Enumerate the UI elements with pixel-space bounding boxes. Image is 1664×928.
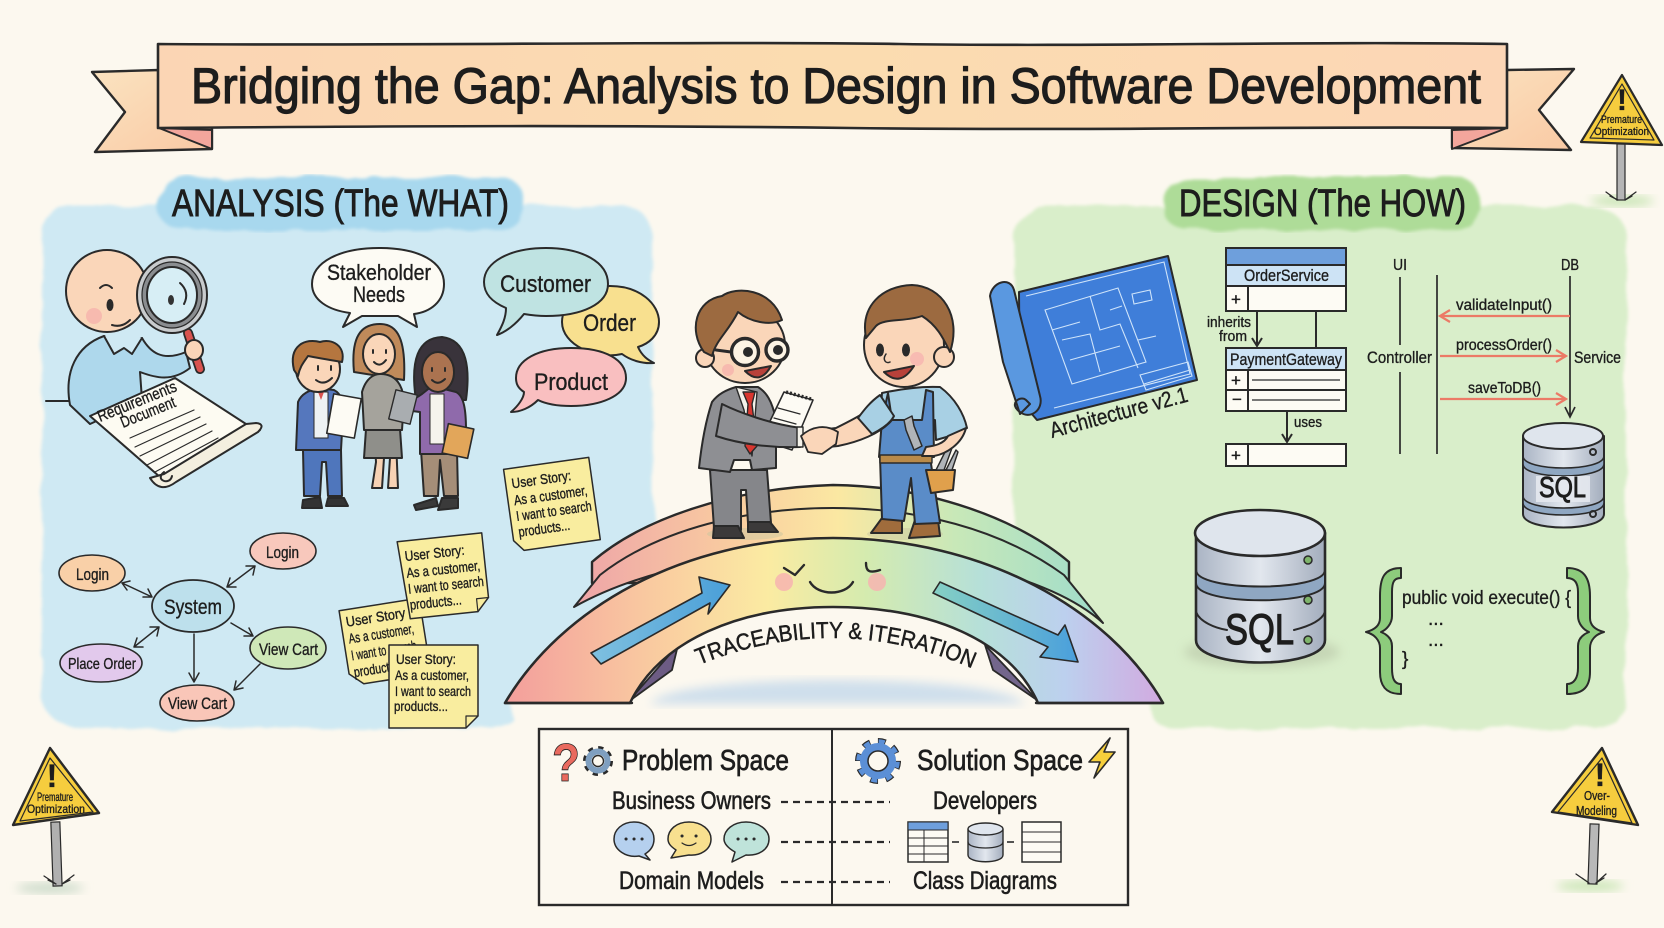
use case: view cart pink: View Cart	[168, 694, 227, 713]
sticky note: middle: products...	[409, 591, 462, 613]
class: payment gateway: +	[1231, 371, 1241, 390]
tool pouch	[926, 446, 958, 493]
ribbon tail: right	[1452, 69, 1574, 150]
row: business owners to developers	[612, 787, 1037, 815]
database small: SQL: SQL	[1539, 472, 1586, 504]
row: chat icons to diagram icons	[614, 822, 1061, 862]
class: order service: +	[1231, 290, 1241, 309]
solution space heading: Solution Space	[917, 745, 1083, 777]
sticky note: front: products...	[394, 698, 448, 714]
row: business owners to developers: Developers	[933, 787, 1037, 815]
inherits arrow	[1207, 311, 1316, 348]
icon: class table	[908, 822, 948, 862]
UML class diagram	[1207, 248, 1346, 466]
use case: view cart pink	[160, 685, 234, 721]
use case: system	[152, 580, 234, 632]
warning sign: premature optimization bottom left: Premature	[37, 790, 73, 804]
database large: SQL: SQL	[1225, 606, 1294, 654]
message: saveToDB: saveToDB()	[1468, 380, 1541, 397]
sticky note: middle: I want to search	[407, 573, 485, 597]
use case diagram	[59, 533, 326, 721]
sticky note: behind: products...	[353, 656, 405, 680]
sticky note: behind	[339, 598, 431, 686]
warning sign: premature optimization bottom left	[13, 748, 99, 893]
stakeholders group	[293, 324, 474, 510]
class: empty: +	[1231, 446, 1241, 465]
blueprint	[990, 256, 1197, 443]
title banner	[92, 43, 1574, 152]
warning sign: premature optimization bottom left: !	[47, 758, 57, 794]
traceability arrow left	[591, 577, 730, 664]
icon: empty table	[1022, 822, 1061, 862]
use case arrows	[122, 566, 260, 690]
right forearm and wrench	[904, 416, 966, 456]
character: developer in overalls	[818, 285, 967, 540]
overalls legs	[880, 457, 940, 524]
inherits arrow: inherits	[1207, 314, 1251, 331]
uses arrow: uses	[1294, 414, 1322, 431]
class: order service: OrderService	[1244, 266, 1329, 285]
lifelines	[1400, 275, 1575, 454]
stakeholder: woman in grey	[353, 324, 404, 488]
sticky note: behind: As a customer,	[347, 620, 415, 647]
bubble: product: Product	[534, 369, 608, 396]
use case: place order	[60, 644, 142, 682]
suit arm	[716, 404, 801, 447]
icon: large gear	[860, 743, 896, 779]
ground shadow	[650, 680, 1025, 704]
sticky note: middle	[397, 533, 490, 619]
database small: SQL	[1523, 423, 1604, 528]
panel: design	[990, 177, 1626, 728]
code snippet with braces: }	[1402, 649, 1408, 670]
icon: small gear	[586, 750, 610, 772]
sequence diagram	[1367, 257, 1621, 454]
lifeline labels	[1367, 257, 1621, 367]
sticky note: top	[504, 457, 600, 552]
message: processOrder	[1440, 337, 1566, 362]
warning sign: premature optimization top: !	[1617, 84, 1627, 117]
sticky note: front: I want to search	[395, 683, 471, 699]
trousers	[710, 470, 771, 530]
message: saveToDB	[1440, 380, 1566, 405]
row: business owners to developers: Business Owners	[612, 787, 771, 815]
character: analyst in suit	[696, 291, 813, 540]
boots	[871, 518, 940, 538]
warning sign: premature optimization top: Premature	[1601, 114, 1642, 126]
warning sign: over-modeling bottom right: Modeling	[1576, 803, 1617, 818]
warning sign: over-modeling bottom right: !	[1595, 757, 1605, 793]
legend frame	[539, 729, 1128, 905]
warning sign: over-modeling bottom right: Over-	[1584, 788, 1610, 803]
problem space heading: Problem Space	[622, 745, 789, 777]
icon: lightning bolt	[1089, 738, 1115, 778]
bridge	[504, 484, 1164, 708]
warning sign: premature optimization bottom left: Optimization	[27, 802, 85, 816]
glasses	[732, 338, 758, 366]
sticky note: middle: User Story:	[404, 542, 465, 564]
message: validateInput: validateInput()	[1456, 297, 1552, 314]
class: payment gateway: −	[1232, 390, 1242, 409]
right brace	[1567, 568, 1604, 694]
row: domain models to class diagrams	[619, 867, 1057, 895]
analyst head	[66, 250, 148, 332]
bubble: customer: Customer	[500, 271, 591, 298]
heading: analysis	[158, 177, 524, 230]
sticky note: top: As a customer,	[513, 482, 588, 508]
bubble: product	[511, 348, 626, 412]
sticky note: top: User Story:	[510, 467, 572, 491]
uses arrow	[1282, 411, 1322, 442]
sticky note: front: As a customer,	[395, 667, 469, 683]
bridge feet lines	[505, 702, 1163, 704]
icon: question mark: ?	[552, 733, 580, 793]
head	[864, 303, 944, 387]
use case: view cart green: View Cart	[259, 640, 318, 659]
notepad	[761, 392, 813, 450]
overalls bib	[879, 390, 934, 457]
class: payment gateway	[1226, 348, 1346, 411]
panel background	[42, 206, 654, 728]
speech bubble: stakeholder needs	[312, 248, 444, 327]
bridge underside	[628, 645, 1037, 702]
row: domain models to class diagrams: Class Diagrams	[913, 867, 1057, 895]
torso shirt	[880, 387, 967, 440]
blueprint label: Architecture v2.1	[1047, 382, 1190, 443]
class: order service	[1226, 248, 1346, 311]
analyst body	[68, 336, 190, 424]
code snippet with braces: ...	[1428, 609, 1444, 630]
message: processOrder: processOrder()	[1456, 337, 1552, 354]
class: payment gateway: PaymentGateway	[1230, 350, 1342, 369]
inherits arrow: from	[1219, 328, 1247, 345]
bridge label: TRACEABILITY & ITERATION	[693, 622, 977, 668]
lifeline labels: DB	[1561, 257, 1579, 274]
heading: design: DESIGN (The HOW)	[1179, 183, 1466, 225]
sticky note: front	[389, 645, 478, 728]
warning sign: premature optimization top: Optimization	[1594, 126, 1649, 138]
panel background	[1013, 206, 1626, 728]
use case: place order: Place Order	[68, 656, 137, 673]
code snippet with braces: ...	[1428, 630, 1444, 651]
handshake	[801, 427, 838, 454]
stakeholder: woman in purple	[389, 337, 474, 510]
head	[705, 307, 785, 383]
lifeline labels: UI	[1393, 257, 1407, 274]
heading: design	[1163, 177, 1480, 230]
use case: login right: Login	[266, 543, 299, 562]
sticky note: top: I want to search	[515, 498, 593, 524]
sticky note: behind: User Story	[345, 605, 406, 630]
bridge arch	[505, 538, 1163, 703]
iteration arrow right	[933, 582, 1078, 662]
stakeholder: man in blue	[293, 341, 361, 508]
scroll text: Requirements	[95, 378, 179, 426]
icon: yellow chat bubble	[668, 822, 711, 858]
heading: analysis: ANALYSIS (The WHAT)	[172, 183, 509, 225]
arm reaching	[818, 402, 892, 448]
warning sign: over-modeling bottom right	[1552, 748, 1638, 891]
use case: login right	[250, 533, 316, 569]
speech bubble: stakeholder needs: Stakeholder	[327, 260, 431, 285]
use case: view cart green	[250, 627, 326, 669]
handshake characters	[696, 285, 967, 540]
suit jacket	[699, 387, 776, 472]
message: validateInput	[1440, 297, 1570, 322]
panel: analysis	[42, 177, 659, 728]
table edge	[46, 400, 96, 402]
sticky note: front: User Story:	[396, 651, 456, 667]
tie	[743, 392, 757, 454]
ribbon tail: left	[92, 70, 212, 152]
code text: public void execute() {	[1402, 588, 1572, 609]
code snippet with braces	[1366, 568, 1604, 694]
domain concept bubbles	[484, 248, 659, 412]
lifeline labels: Service	[1574, 348, 1621, 367]
requirements scroll: Document	[118, 394, 179, 432]
ribbon body	[158, 43, 1507, 129]
magnifying glass	[137, 257, 207, 369]
use case: login left	[59, 555, 125, 591]
bridge deck	[574, 508, 1103, 623]
warning sign: premature optimization top	[1581, 75, 1662, 206]
database large: SQL	[1184, 510, 1340, 668]
sticky note: behind: I want to search	[350, 637, 418, 663]
title: Bridging the Gap: Analysis to Design in Software Development	[191, 58, 1481, 114]
icon: mini database	[968, 823, 1003, 862]
legend: problem and solution space	[539, 729, 1128, 905]
shoes	[713, 522, 778, 538]
bubble: order: Order	[583, 310, 636, 337]
speech bubble: stakeholder needs: Needs	[353, 282, 405, 307]
class: empty	[1226, 444, 1346, 466]
requirements scroll	[90, 378, 262, 487]
use case: login left: Login	[76, 565, 109, 584]
icon: blue chat bubble	[614, 822, 654, 860]
lifeline labels: Controller	[1367, 348, 1432, 367]
bubble: order	[562, 286, 659, 363]
icon: teal chat bubble	[724, 822, 769, 862]
analyst reading requirements	[46, 250, 262, 487]
sticky note: middle: As a customer,	[406, 557, 481, 581]
bubble: customer	[484, 248, 608, 335]
sticky notes	[339, 457, 600, 728]
belt	[880, 455, 932, 463]
row: domain models to class diagrams: Domain Models	[619, 867, 764, 895]
bridge face	[775, 563, 886, 592]
left brace	[1366, 568, 1401, 694]
sticky note: top: products...	[517, 517, 571, 540]
bridge back rail	[592, 485, 1069, 583]
use case: system: System	[164, 596, 222, 619]
